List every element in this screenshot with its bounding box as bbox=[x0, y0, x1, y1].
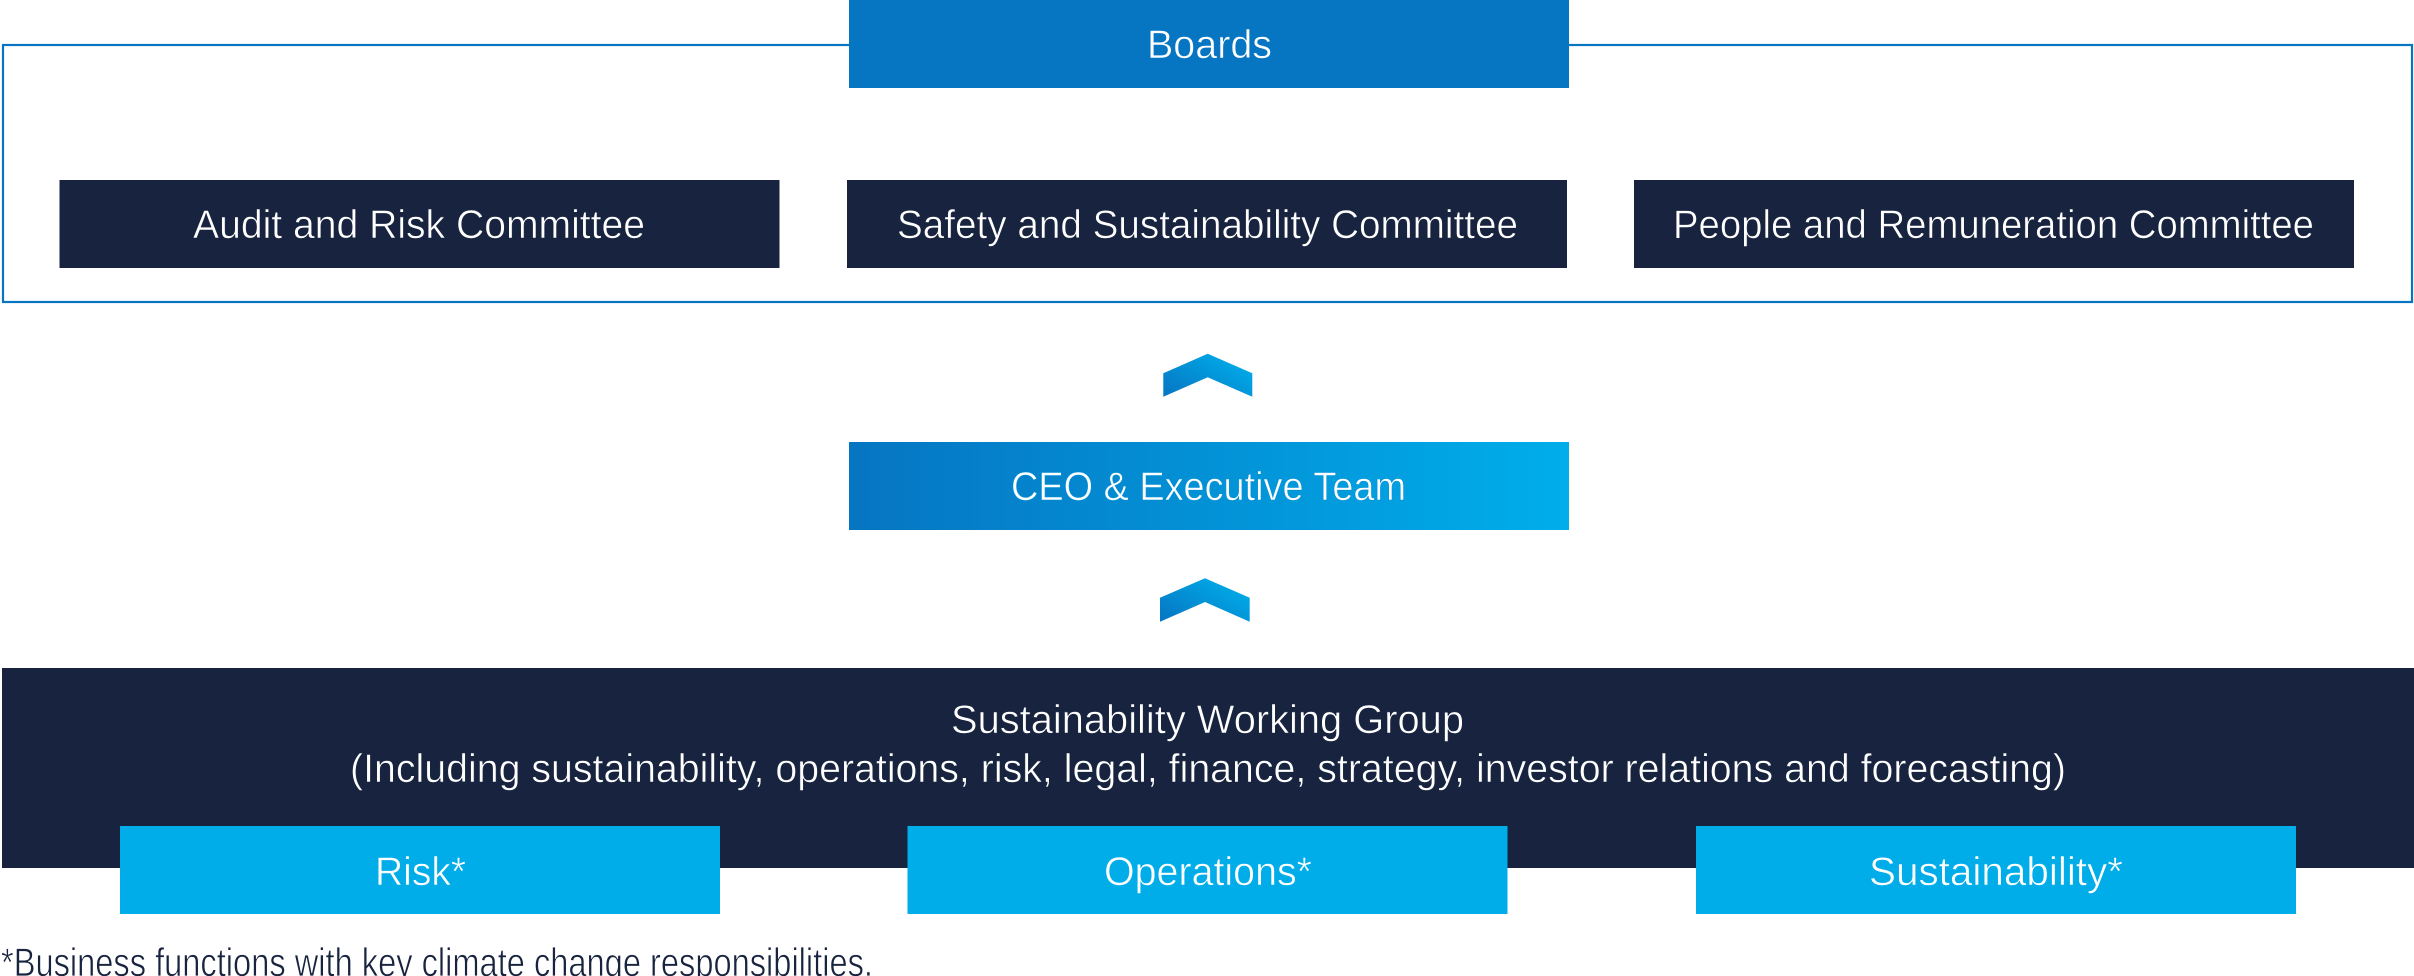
box: Safety and Sustainability Committee bbox=[847, 180, 1567, 268]
box: People and Remuneration Committee: People and Remuneration Committee bbox=[1673, 203, 2314, 247]
box: Safety and Sustainability Committee: Safety and Sustainability Committee bbox=[897, 203, 1518, 247]
box: CEO & Executive Team: CEO & Executive Team bbox=[1011, 465, 1406, 509]
box: CEO & Executive Team bbox=[849, 442, 1569, 530]
panel: board committees frame bbox=[3, 45, 2412, 302]
arrow: up chevron to Boards bbox=[1163, 354, 1252, 397]
box: Sustainability bbox=[1696, 826, 2296, 914]
box: Audit and Risk Committee: Audit and Risk Committee bbox=[193, 203, 645, 247]
box: Boards: Boards bbox=[1147, 23, 1272, 67]
box: Risk bbox=[120, 826, 720, 914]
text: working group members: (Including sustainability, operations, risk, legal, finance, strategy, investor relations and forecasting) bbox=[350, 747, 2066, 791]
box: People and Remuneration Committee bbox=[1634, 180, 2354, 268]
box: Boards bbox=[849, 0, 1569, 88]
heading: Sustainability Working Group: Sustainability Working Group bbox=[951, 698, 1464, 742]
box: Operations bbox=[908, 826, 1508, 914]
panel: Sustainability Working Group bbox=[2, 668, 2414, 868]
box: Risk: Risk* bbox=[375, 850, 466, 894]
arrow: up chevron to CEO bbox=[1160, 578, 1250, 622]
box: Audit and Risk Committee bbox=[60, 180, 780, 268]
box: Operations: Operations* bbox=[1104, 850, 1312, 894]
box: Sustainability: Sustainability* bbox=[1869, 850, 2123, 894]
